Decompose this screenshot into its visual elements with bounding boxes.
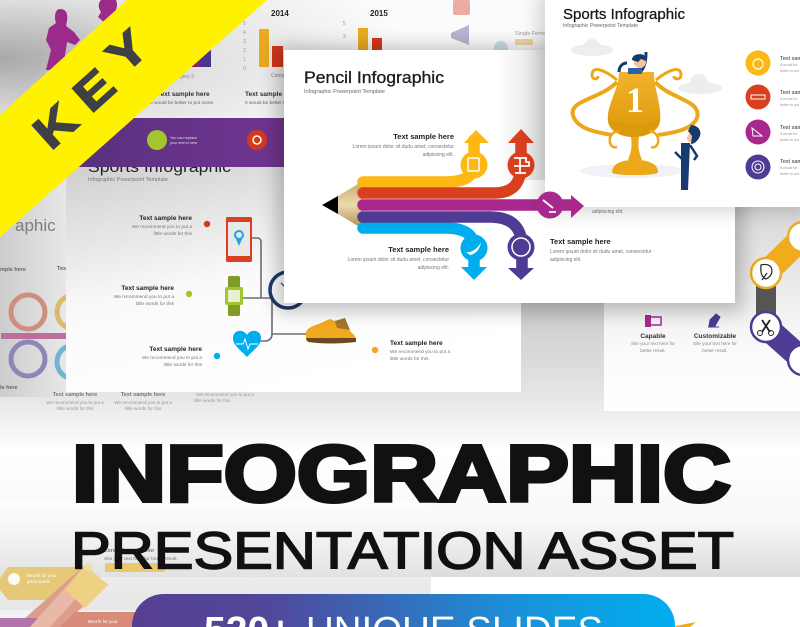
chart: 2014 bars: Category 1 [271,73,296,79]
text: capable [631,333,675,353]
text: lorem ipsum faded caption [104,548,178,562]
icon: purple arrow with microscope [536,192,584,218]
chart: 2014 bars: 5 [243,21,246,27]
text: trophy slide side labels: better to put [780,69,799,73]
faded captions below slide: little words for this [125,406,162,411]
text block: right sample: Lorem ipsum dolor sit dudu amet, consectetur [550,249,652,255]
text: trophy slide side labels: better to put [780,172,799,176]
icon: stopwatch circle [746,50,770,76]
text: customizable: Site your text here for [693,341,737,346]
icon: customizable pen [708,314,720,327]
text block: sample four: We recommend you to put a [390,349,451,355]
arrow: indigo down [363,217,534,280]
text: trophy slide side labels: better to put [780,138,799,142]
icon: target [247,130,267,150]
chart: 2015 bars: 3 [343,34,346,40]
banner: yellow ribbon label: Best fit for your [27,573,57,578]
panel: purple band: your text in here [170,141,197,145]
background gradient band [0,300,800,577]
text: customizable: better result. [702,348,728,353]
text block: lower sample: Lorem ipsum dolor sit dudu amet, consectetur [348,257,449,263]
panel: top-left chart slide [0,0,550,167]
faded captions below slide: We recommend you to put a [46,400,104,405]
text: left captions [0,266,68,391]
banner: yellow ribbon label: great words [27,579,51,584]
arrow: yellow up [363,130,489,182]
connector lines [243,238,306,341]
text block: right sample: Text sample here [550,237,611,246]
text block: sample three: little words for this [164,362,203,368]
banner: red ribbon label [60,612,140,627]
text block: sample one: little words for this [154,231,193,237]
icon: standing man [675,125,700,190]
icon: heart [233,331,261,357]
text block: top sample: adipiscing elit. [423,152,454,158]
text: trophy slide side labels: It would be [780,132,797,136]
text: trophy slide side labels: better to put [780,103,799,107]
chart: small bars: gory 3 [180,74,194,80]
text block: right sample: adipiscing elit. [592,209,623,215]
dots [186,221,378,359]
text: trophy number: 1 [626,80,644,120]
bar: faded progress [105,563,200,572]
text: KEY: Y [96,20,158,83]
icon: phone [226,217,252,262]
icon: orange accent behind pill [670,622,696,627]
panel: sports trophy slide [545,0,800,207]
text: KEY: K [23,93,87,159]
text block: right sample [550,209,652,263]
text block: sample three: We recommend you to put a [142,355,202,361]
text: pencil subtitle: Infographic Powerpoint Template [304,89,385,95]
text block: sample four: Text sample here [390,340,443,347]
ribbon: yellow corner banner [0,0,267,237]
title: infographic: INFOGRAPHIC [72,429,731,518]
text: trophy slide side labels [780,56,800,176]
text: left captions: mple here [0,267,26,273]
icon: pencil tip [322,181,363,229]
heading: sports title clipped: Sports Infographic [88,159,231,176]
chart: 2014 bars: 2 [243,48,246,54]
icons: faded top right: Single Female [515,31,550,37]
text: band captions: You can replace [170,136,197,140]
text block: sample two: Text sample here [121,285,174,292]
text: customizable [693,333,737,353]
icons: faded top right [451,0,550,55]
text block: top sample [353,132,454,158]
text: chart captions: Text sample here [245,91,298,98]
shadow: top right slide [538,0,800,212]
text block: sample three [142,346,203,368]
clouds [571,39,722,178]
text block: lower sample: adipiscing elit. [418,265,449,271]
chart: 2014 bars: 0 [243,66,246,72]
heading: faded title: aphic [15,216,56,235]
text: chart captions: It would be better to put some [150,100,214,106]
heading: trophy slide title: Sports Infographic [563,6,685,23]
chart: 2014 bars: 3 [243,39,246,45]
text block: sample one: We recommend you to put a [132,224,192,230]
chart: 2015 bars: 5 [343,21,346,27]
panel: right chain slide [604,207,800,411]
text block: sample three: Text sample here [149,346,202,353]
chart: 2015 bars: 2015 [370,9,388,18]
text: customizable: Customizable [694,333,737,340]
text block: sample two [114,285,175,307]
text: capable: better result. [640,348,666,353]
text: lorem ipsum faded caption: Site your text here for better result. [104,556,178,562]
chart: 2014 bars: 4 [243,30,246,36]
text block: sample four [390,340,451,362]
panel: left rings slide [0,167,91,397]
text block: top sample: Lorem ipsum dolor sit dudu amet, consectetur [353,144,454,150]
subtitle: presentation asset: PRESENTATION ASSET [71,522,734,580]
banner: purple ribbon [0,618,38,627]
text: trophy slide side labels: It would be [780,63,797,67]
text block: sample two: We recommend you to put a [114,294,174,300]
chart: 2014 bars [243,9,296,79]
banner: unique slides pill [132,594,675,627]
chart: small bars [180,48,211,80]
faded captions below slide: little words for this [194,398,231,403]
text block: lower sample: Text sample here [388,245,449,254]
arrow: blue down [363,228,488,280]
diagram: rings [1,295,91,379]
panel: bottom-left slide [0,500,800,627]
text: lorem ipsum faded caption: Lorem Ipsum Dolor [104,548,155,554]
text block: sample one: Text sample here [139,215,192,222]
icon: bike circle [746,120,770,144]
text: KEY: E [63,59,125,122]
icon: eye [147,130,167,150]
text: left captions: le here [0,385,18,391]
icon: capable monitor [645,315,661,327]
faded captions below slide: We recommend you to put a [114,400,172,405]
text block: sample one [132,215,193,237]
banner: red ribbon label: Best fit for your [88,619,118,624]
text block: top sample: Text sample here [393,132,454,141]
text: KEY [23,20,158,159]
text: trophy slide side labels: It would be [780,166,797,170]
panel: sports slide with devices [66,159,521,392]
text block: sample two: little words for this [136,301,175,307]
text block: sample four: little words for this. [390,356,430,362]
banner: yellow ribbon label [0,567,108,600]
arrow: red up [363,129,534,193]
text: chart captions: It would be better to put some [245,100,309,106]
icon: business people silhouettes [46,0,117,70]
text: capable: Capable [640,333,666,340]
icon: shoe [306,318,356,344]
text: chart captions [150,91,309,106]
bar: purple [363,199,560,211]
chart: 2015 bars [343,9,388,50]
icon: watch [225,276,243,316]
icon: target circle [746,154,770,180]
diagram: chain connectors [751,222,800,375]
text block: lower sample [348,245,449,271]
text: left captions: Text [57,266,68,272]
text: trophy slide side labels: It would be [780,97,797,101]
faded captions below slide: Text sample here [53,392,97,398]
text: capable: Site your text here for [631,341,675,346]
text: chart captions: Text sample here [157,91,210,98]
faded captions below slide: We recommend you to put a [196,392,254,397]
icon: trophy [573,70,698,175]
text block: right sample: adipiscing elit. [550,257,581,263]
heading: pencil title: Pencil Infographic [304,68,445,87]
faded captions below slide [46,392,254,411]
faded captions below slide: Text sample here [121,392,165,398]
panel: purple band [70,118,300,167]
text: trophy slide subtitle: Infographic Powerpoint Template [563,23,638,29]
faded captions below slide: little words for this [57,406,94,411]
shadow: pencil slide [276,46,743,312]
text: sports subtitle: Infographic Powerpoint Template [88,177,168,183]
icon: bed circle [746,84,770,110]
chart: 2014 bars: 1 [243,57,246,63]
icon: clock [270,272,306,308]
icon: cheering person [619,52,646,74]
chart: 2014 bars: 2014 [271,9,289,18]
panel: pencil slide [284,50,735,303]
icon: diagonal pencil [15,563,108,627]
